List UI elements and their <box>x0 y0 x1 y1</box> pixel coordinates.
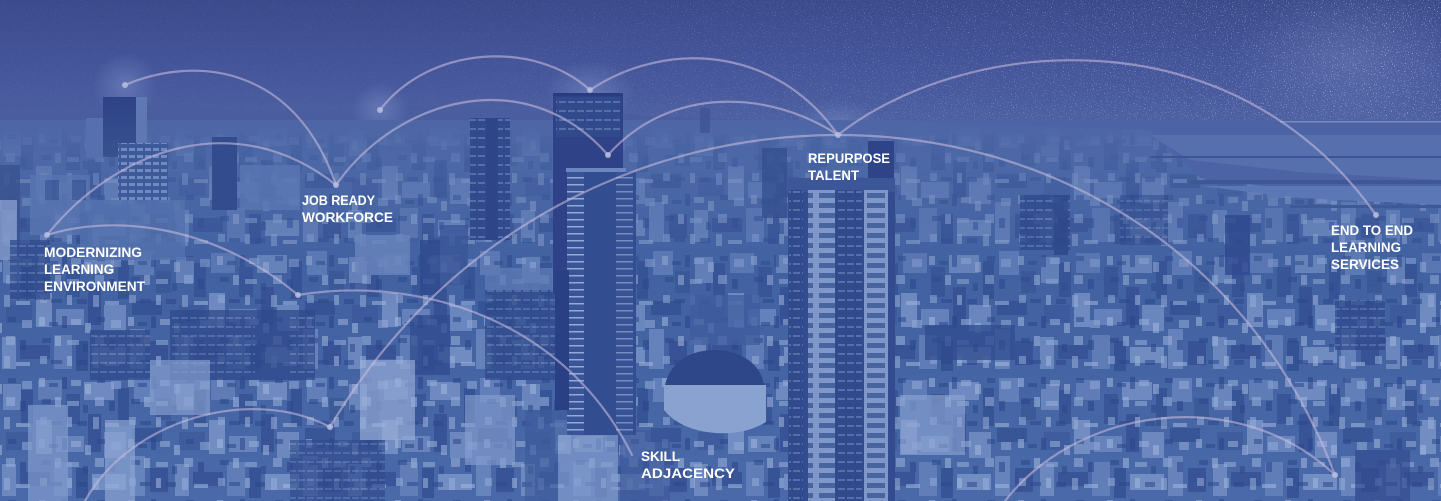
label: end to end learning services: SERVICES <box>1331 257 1399 272</box>
arc: bottom left <box>85 409 330 501</box>
city fine texture <box>0 125 1441 501</box>
far skyline blocks <box>0 108 1250 295</box>
label: job ready workforce: WORKFORCE <box>302 210 393 225</box>
label: end to end learning services <box>1331 223 1413 272</box>
milky way glow <box>1230 0 1441 130</box>
dome building <box>664 350 766 433</box>
mid city blocks <box>10 240 1385 380</box>
arc: bottom right <box>1005 417 1335 501</box>
network nodes <box>44 82 1379 478</box>
tower: tall foreground <box>788 141 895 501</box>
city base <box>0 120 1441 501</box>
tower: slim left <box>212 137 237 210</box>
arc: job ready to centre <box>336 100 608 185</box>
night sky background <box>0 0 1441 135</box>
label: repurpose talent: REPURPOSE <box>808 151 890 166</box>
label: modernizing learning environment <box>44 245 146 294</box>
distant hills <box>0 100 800 125</box>
arc: tower to job ready <box>125 71 336 185</box>
arc: upper left to centre top <box>380 56 590 110</box>
tower: centre striped <box>555 168 636 435</box>
tower: striped centre-left <box>470 118 510 240</box>
label: skill adjacency <box>641 449 735 481</box>
arc: centre to repurpose <box>608 102 838 155</box>
label: repurpose talent: TALENT <box>808 168 860 183</box>
tower: upper left <box>86 97 168 200</box>
label: modernizing learning environment: ENVIRONMENT <box>44 279 146 294</box>
label: repurpose talent <box>808 151 890 183</box>
label: job ready workforce <box>302 193 393 225</box>
arc: modernizing to job ready <box>47 143 336 235</box>
node glows <box>93 53 883 156</box>
stars <box>0 0 1441 122</box>
arc: centre top to repurpose <box>590 58 838 135</box>
label: job ready workforce: JOB READY <box>302 193 375 208</box>
label: end to end learning services: END TO END <box>1331 223 1413 238</box>
foreground city blocks <box>28 360 1410 501</box>
arc: long span through repurpose <box>330 135 1335 475</box>
tower: dark behind <box>553 93 623 294</box>
arc: repurpose to end to end <box>838 60 1376 215</box>
label: skill adjacency: SKILL <box>641 449 680 464</box>
river and bay <box>880 120 1441 208</box>
label: modernizing learning environment: MODERNIZING <box>44 245 142 260</box>
label: modernizing learning environment: LEARNING <box>44 262 114 277</box>
label: end to end learning services: LEARNING <box>1331 240 1401 255</box>
arc: modernizing to mid node <box>47 225 298 295</box>
arc: mid node to skill adjacency <box>298 290 632 455</box>
label: skill adjacency: ADJACENCY <box>641 466 735 481</box>
